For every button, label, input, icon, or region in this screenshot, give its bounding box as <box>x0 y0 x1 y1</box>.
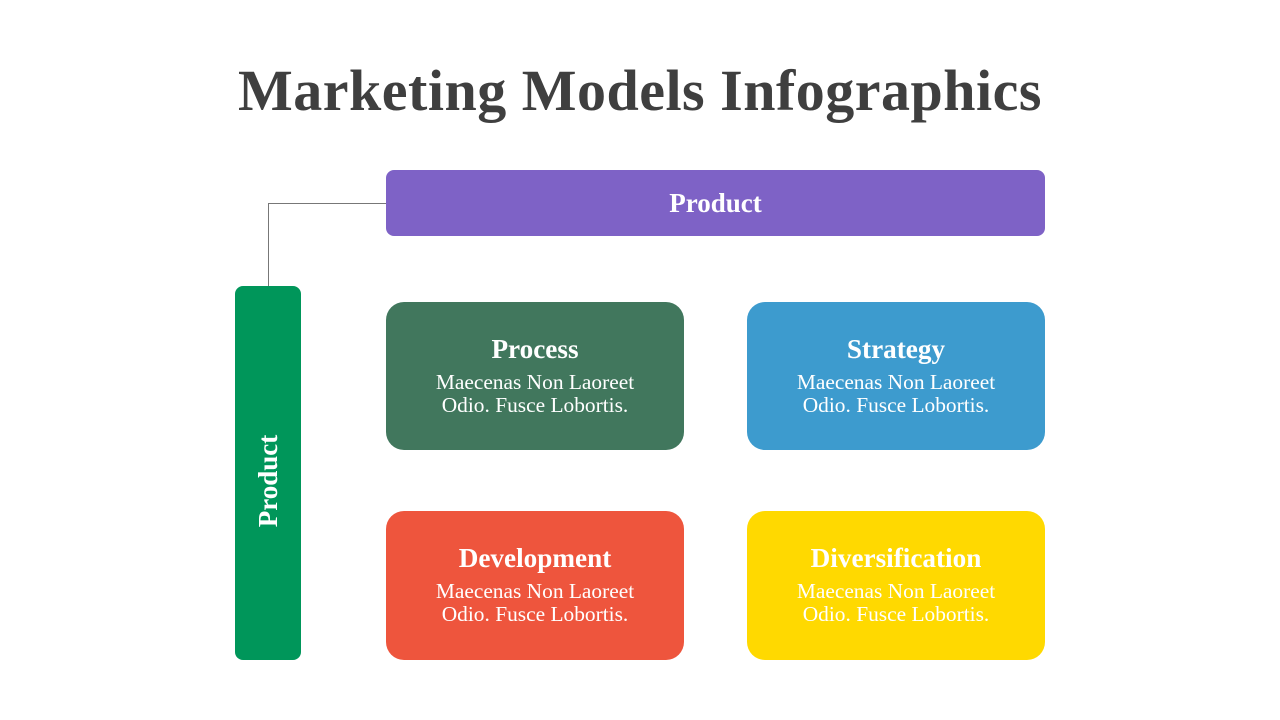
diversification text: Maecenas Non Laoreet <box>797 579 995 603</box>
title: Marketing Models Infographics <box>238 58 1042 123</box>
connector line <box>268 203 386 286</box>
development text: Maecenas Non Laoreet <box>436 579 634 603</box>
panel: side product bar <box>235 286 301 660</box>
panel: diversification <box>747 511 1045 660</box>
panel: development <box>386 511 684 660</box>
panel: strategy <box>747 302 1045 450</box>
development text: Odio. Fusce Lobortis. <box>442 602 628 626</box>
development text <box>436 579 634 626</box>
process heading: Process <box>491 334 579 364</box>
process text: Odio. Fusce Lobortis. <box>442 393 628 417</box>
panel: top product bar <box>386 170 1045 236</box>
diversification heading: Diversification <box>811 543 981 573</box>
diversification text: Odio. Fusce Lobortis. <box>803 602 989 626</box>
development heading: Development <box>459 543 611 573</box>
side bar label: Product <box>253 435 283 527</box>
panel: process <box>386 302 684 450</box>
strategy text: Maecenas Non Laoreet <box>797 370 995 394</box>
strategy text: Odio. Fusce Lobortis. <box>803 393 989 417</box>
strategy heading: Strategy <box>847 334 945 364</box>
diversification text <box>797 579 996 626</box>
process text <box>436 370 634 417</box>
process text: Maecenas Non Laoreet <box>436 370 634 394</box>
strategy text <box>797 370 996 417</box>
panel: top product bar: Product <box>669 188 762 218</box>
